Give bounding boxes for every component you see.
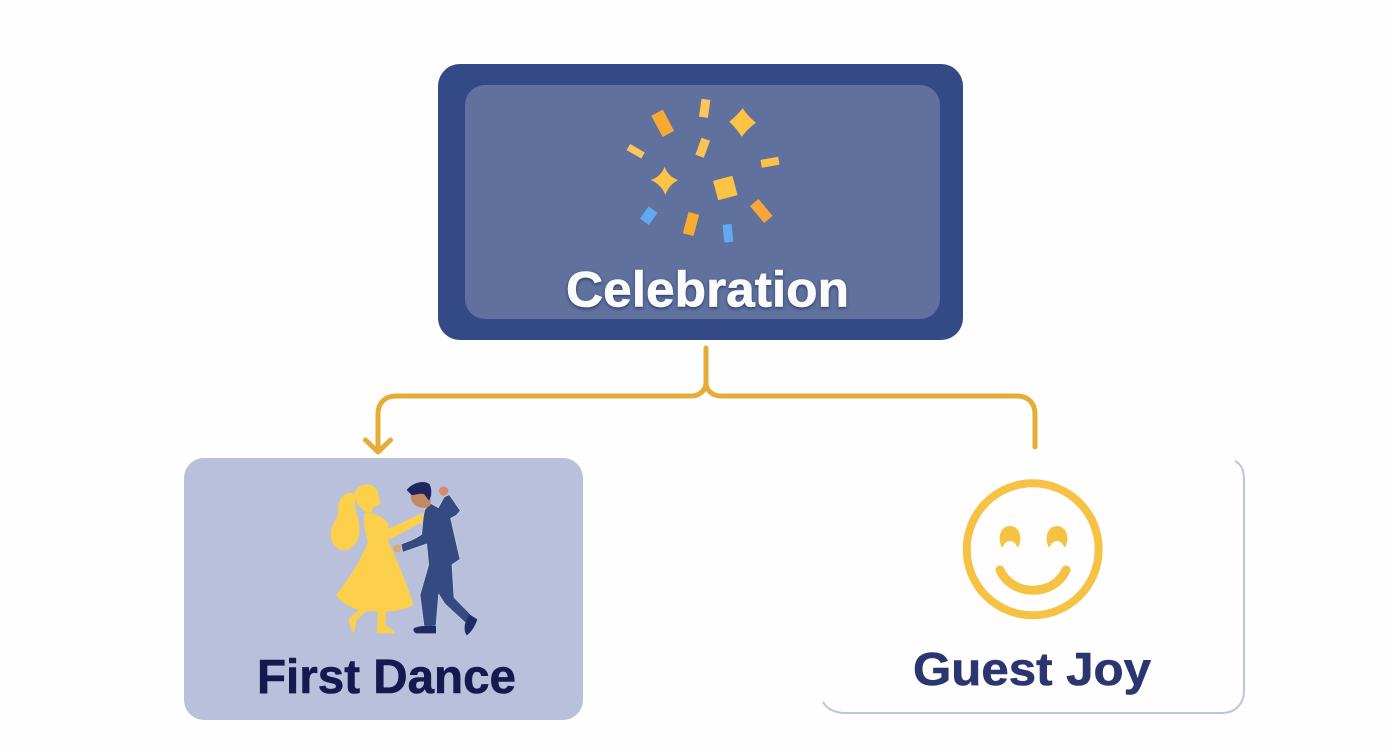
icon: dancing couple	[331, 482, 477, 635]
panel: Guest Joy	[823, 461, 1244, 713]
panel: First Dance	[184, 458, 583, 720]
man	[393, 482, 477, 635]
icon: confetti	[627, 99, 780, 243]
label: Guest Joy: Guest Joy	[913, 643, 1151, 695]
heading: Celebration: Celebration	[566, 262, 849, 318]
arrow: connector branching to First Dance and Guest Joy	[366, 348, 1035, 452]
woman	[331, 484, 432, 633]
icon: smiley face	[967, 483, 1099, 615]
label: First Dance: First Dance	[257, 651, 516, 704]
panel: Celebration	[438, 64, 963, 340]
